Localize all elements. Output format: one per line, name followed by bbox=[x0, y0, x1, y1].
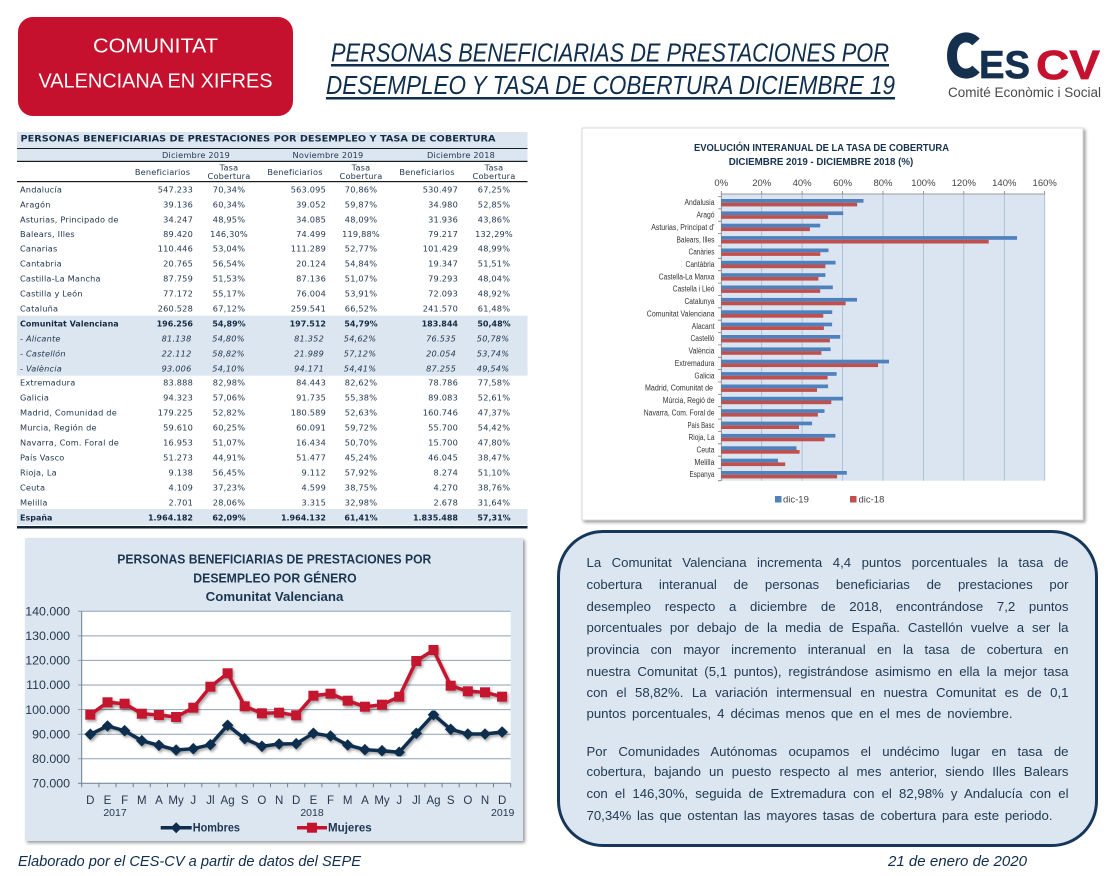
table rows: 47,37% bbox=[478, 408, 510, 418]
text panel: commentary: con el 146,30%, seguida de Extremadura con el 82,98% y Andalucía con el bbox=[586, 786, 1068, 801]
table rows: 2.701 bbox=[169, 498, 193, 508]
table rows: 20.124 bbox=[296, 259, 326, 269]
table rows: 28,06% bbox=[213, 498, 245, 508]
table rows: 179.225 bbox=[158, 408, 193, 418]
table rows: 54,80% bbox=[212, 334, 245, 344]
table header: Beneficiarios bbox=[399, 167, 455, 177]
table rows: 54,41% bbox=[344, 364, 376, 374]
table rows: 94.323 bbox=[163, 393, 193, 403]
table rows: 101.429 bbox=[423, 244, 458, 254]
panel: line chart by gender bbox=[25, 538, 523, 841]
table rows: 39.136 bbox=[163, 200, 193, 210]
table header: Beneficiarios bbox=[267, 167, 323, 177]
table rows: 62,09% bbox=[212, 514, 246, 523]
header badge: Comunitat Valenciana en xifres: COMUNITAT bbox=[93, 34, 218, 58]
table header bbox=[135, 150, 515, 181]
x axis month labels: M bbox=[137, 795, 147, 807]
bar chart category labels: Ceuta bbox=[696, 446, 715, 454]
table rows: 1.964.182 bbox=[148, 514, 193, 523]
table rows: Extremadura bbox=[20, 378, 75, 388]
table rows: 57,31% bbox=[477, 514, 511, 523]
table rows: 8.274 bbox=[434, 468, 458, 478]
table rows: 48,95% bbox=[213, 214, 245, 224]
table rows: 19.347 bbox=[428, 259, 458, 269]
bar chart category labels: Navarra, Com. Foral de bbox=[644, 408, 714, 417]
table rows: 51,51% bbox=[478, 259, 510, 269]
x axis percentages: 100% bbox=[911, 178, 936, 189]
y axis labels: 90.000 bbox=[32, 727, 70, 741]
table rows: 57,92% bbox=[345, 468, 377, 478]
table rows: 53,91% bbox=[345, 289, 377, 299]
bar chart category labels: Madrid, Comunitat de bbox=[645, 384, 713, 393]
table rows: 77.172 bbox=[163, 289, 193, 299]
table rows: 89.420 bbox=[163, 229, 193, 239]
table rows: 81.352 bbox=[294, 334, 324, 344]
table rows: Ceuta bbox=[20, 483, 45, 493]
x axis month labels: A bbox=[155, 795, 163, 807]
line chart title bbox=[117, 552, 431, 604]
bar chart category labels: Múrcia, Regió de bbox=[663, 396, 714, 405]
y axis labels: 120.000 bbox=[25, 654, 70, 668]
table rows: 4.599 bbox=[302, 483, 326, 493]
bar chart legend: dic-19 bbox=[783, 494, 809, 506]
table header: Cobertura bbox=[340, 171, 382, 181]
table rows: Comunitat Valenciana bbox=[20, 320, 119, 329]
x axis percentages: 80% bbox=[873, 178, 893, 189]
table rows bbox=[20, 185, 513, 523]
y axis labels: 70.000 bbox=[32, 776, 70, 790]
table rows: 55,17% bbox=[213, 289, 245, 299]
x axis month labels: J bbox=[396, 795, 402, 807]
table header: Diciembre 2018 bbox=[427, 150, 495, 160]
x axis month labels: N bbox=[481, 795, 489, 807]
table rows: 84.443 bbox=[296, 378, 326, 388]
y axis labels: 80.000 bbox=[32, 752, 70, 766]
table rows: 60,34% bbox=[213, 200, 245, 210]
line chart legend: Mujeres bbox=[328, 823, 372, 835]
table rows: 16.953 bbox=[163, 438, 193, 448]
table rows: 197.512 bbox=[290, 320, 326, 329]
table rows: 196.256 bbox=[157, 320, 193, 329]
x axis percentages: 60% bbox=[833, 178, 853, 189]
x axis percentages: 40% bbox=[793, 178, 812, 189]
table rows: 259.541 bbox=[291, 304, 326, 314]
table rows: 77,58% bbox=[478, 378, 510, 388]
table rows: 260.528 bbox=[158, 304, 193, 314]
table rows: 146,30% bbox=[210, 229, 248, 239]
bar chart category labels: Alacant bbox=[692, 322, 715, 331]
table rows: 530.497 bbox=[423, 185, 458, 195]
table rows: 44,91% bbox=[213, 453, 245, 463]
table rows: Melilla bbox=[20, 498, 48, 508]
x axis percentages: 120% bbox=[952, 178, 976, 189]
table rows: 76.535 bbox=[426, 334, 456, 344]
x axis month labels: O bbox=[257, 795, 266, 807]
x axis month labels: J bbox=[190, 795, 196, 807]
table rows: 59,87% bbox=[345, 200, 377, 210]
table rows: 37,23% bbox=[213, 483, 245, 493]
logo: CES-CV: Comité Econòmic i Social bbox=[948, 84, 1101, 100]
x axis percentages: 0% bbox=[714, 178, 729, 189]
table rows: 111.289 bbox=[291, 244, 326, 254]
table rows: 46.045 bbox=[428, 453, 458, 463]
year labels: 2017 bbox=[103, 807, 127, 819]
table rows: España bbox=[20, 514, 52, 523]
table rows: 53,04% bbox=[213, 244, 245, 254]
footer date: 21 de enero de 2020 bbox=[887, 854, 1027, 870]
bar chart category labels: Rioja, La bbox=[688, 433, 715, 442]
text panel: commentary: puntos porcentuales, 4 décimas menos que en el mes de noviembre. bbox=[586, 706, 1012, 721]
table rows: 51,07% bbox=[345, 274, 377, 284]
bar chart category labels: Catalunya bbox=[684, 297, 715, 306]
table rows: 54,89% bbox=[212, 320, 246, 329]
table rows: 38,47% bbox=[478, 453, 510, 463]
table header: Cobertura bbox=[473, 171, 515, 181]
footer source note: Elaborado por el CES-CV a partir de datos del SEPE bbox=[18, 854, 361, 870]
text panel: commentary: 70,34% las que ostentan las mayores tasas de cobertura para este periodo. bbox=[586, 808, 1052, 823]
logo: CES-CV bbox=[948, 37, 1101, 100]
bar chart category labels: Extremadura bbox=[675, 359, 715, 368]
series: Hombres bbox=[90, 715, 502, 752]
table rows: 48,92% bbox=[478, 289, 510, 299]
table rows: 54,62% bbox=[344, 334, 376, 344]
bar chart category labels: Castella i Lleó bbox=[673, 285, 715, 294]
x axis month labels: Ag bbox=[221, 795, 235, 807]
bar chart category labels: Melilla bbox=[694, 458, 715, 467]
table rows: 51.477 bbox=[296, 453, 326, 463]
table header: Beneficiarios bbox=[135, 167, 190, 177]
table rows: - Castellón bbox=[20, 349, 66, 359]
bar chart legend bbox=[775, 494, 884, 506]
table rows: 50,48% bbox=[477, 320, 511, 329]
table rows: 20.054 bbox=[426, 349, 456, 359]
table rows: 55.700 bbox=[428, 422, 458, 432]
table rows: 59.610 bbox=[163, 422, 193, 432]
table rows: 74.499 bbox=[296, 229, 326, 239]
text panel: commentary bbox=[557, 530, 1098, 847]
table rows: 132,29% bbox=[475, 229, 513, 239]
table rows: 54,10% bbox=[212, 364, 245, 374]
data table bbox=[17, 132, 528, 528]
table rows: 52,85% bbox=[478, 200, 510, 210]
main title: DESEMPLEO Y TASA DE COBERTURA DICIEMBRE 19 bbox=[326, 70, 895, 100]
table rows: 2.678 bbox=[434, 498, 458, 508]
bar chart category labels: Canàries bbox=[688, 248, 715, 257]
table rows: 160.746 bbox=[423, 408, 458, 418]
table rows: 45,24% bbox=[345, 453, 377, 463]
main title: PERSONAS BENEFICIARIAS DE PRESTACIONES POR bbox=[331, 38, 889, 68]
table rows: 20.765 bbox=[163, 259, 193, 269]
x axis month labels: My bbox=[374, 795, 390, 807]
table rows: 51,53% bbox=[213, 274, 245, 284]
table rows: 82,98% bbox=[213, 378, 245, 388]
header badge: Comunitat Valenciana en xifres: VALENCIANA EN XIFRES bbox=[38, 70, 272, 92]
x axis month labels: Jl bbox=[206, 795, 215, 807]
bar chart category labels: València bbox=[688, 347, 715, 356]
bar chart category labels: País Basc bbox=[688, 421, 715, 430]
table rows: 51,07% bbox=[213, 438, 245, 448]
table rows: 39.052 bbox=[296, 200, 326, 210]
table rows: 93.006 bbox=[162, 364, 192, 374]
year labels bbox=[103, 807, 515, 819]
table header: Noviembre 2019 bbox=[293, 150, 363, 160]
x axis month labels: S bbox=[447, 795, 455, 807]
table rows: 56,45% bbox=[213, 468, 245, 478]
header badge: Comunitat Valenciana en xifres bbox=[18, 17, 293, 116]
table rows: 54,79% bbox=[344, 320, 378, 329]
table rows: Cantabria bbox=[20, 259, 62, 269]
table rows: 57,12% bbox=[344, 349, 376, 359]
text panel: commentary: La Comunitat Valenciana incrementa 4,4 puntos porcentuales la tasa de bbox=[586, 555, 1068, 570]
bar chart category labels: Comunitat Valenciana bbox=[647, 310, 715, 318]
bar chart category labels: Andalusia bbox=[684, 198, 715, 207]
table rows: 110.446 bbox=[158, 244, 193, 254]
table rows: Navarra, Com. Foral de bbox=[20, 438, 119, 448]
line chart legend bbox=[161, 822, 372, 835]
logo: CES-CV: ES bbox=[979, 44, 1030, 87]
x axis month labels: M bbox=[343, 795, 352, 807]
table rows: 52,77% bbox=[345, 244, 377, 254]
line chart title: DESEMPLEO POR GÉNERO bbox=[193, 570, 357, 585]
table rows: Aragón bbox=[20, 200, 51, 210]
table rows: 78.786 bbox=[428, 378, 458, 388]
table rows: 70,86% bbox=[345, 185, 377, 195]
table rows: 87.136 bbox=[296, 274, 326, 284]
table rows: 55,38% bbox=[345, 393, 377, 403]
bar chart legend: dic-18 bbox=[858, 494, 884, 506]
table rows: 183.844 bbox=[422, 320, 458, 329]
table rows: 31,64% bbox=[478, 498, 510, 508]
table rows: Galicia bbox=[20, 393, 49, 403]
x axis month labels: D bbox=[86, 795, 94, 807]
table rows: 81.138 bbox=[162, 334, 192, 344]
x axis percentages: 20% bbox=[752, 178, 772, 189]
bars dic-18 bbox=[721, 203, 989, 478]
table rows: 43,86% bbox=[478, 214, 510, 224]
bar chart category labels: Castella-La Manxa bbox=[659, 272, 715, 281]
bar chart category labels: Castelló bbox=[690, 334, 715, 343]
bar chart title: DICIEMBRE 2019 - DICIEMBRE 2018 (%) bbox=[729, 156, 913, 168]
table rows: 34.085 bbox=[296, 214, 326, 224]
table rows: 48,99% bbox=[478, 244, 510, 254]
table rows: 89.083 bbox=[428, 393, 458, 403]
bar chart title bbox=[694, 141, 949, 168]
y axis labels bbox=[25, 604, 70, 790]
table header: Tasa bbox=[484, 162, 503, 172]
table rows: 51,10% bbox=[478, 468, 510, 478]
table rows: 60.091 bbox=[296, 422, 326, 432]
table rows: 22.112 bbox=[162, 349, 192, 359]
table rows: 119,88% bbox=[342, 229, 380, 239]
x axis month labels: Ag bbox=[426, 795, 441, 807]
text panel: commentary: cobertura interanual de personas beneficiarias de prestaciones por bbox=[586, 577, 1068, 592]
bar chart title: EVOLUCIÓN INTERANUAL DE LA TASA DE COBERTURA bbox=[694, 141, 949, 154]
bar chart category labels: Galicia bbox=[694, 371, 715, 380]
bar chart category labels: Aragó bbox=[696, 211, 715, 220]
table rows: - Alicante bbox=[20, 334, 61, 344]
x axis month labels: O bbox=[463, 795, 472, 807]
table rows: 59,72% bbox=[345, 422, 377, 432]
main title bbox=[326, 38, 895, 100]
table rows: Madrid, Comunidad de bbox=[20, 408, 117, 418]
table rows: 4.109 bbox=[169, 483, 193, 493]
x axis month labels: D bbox=[498, 795, 506, 807]
table rows: 91.735 bbox=[296, 393, 326, 403]
table rows: 1.964.132 bbox=[281, 514, 326, 523]
table rows: 50,78% bbox=[477, 334, 509, 344]
table rows: 79.293 bbox=[428, 274, 458, 284]
table rows: Castilla-La Mancha bbox=[20, 274, 101, 284]
table header: Diciembre 2019 bbox=[162, 150, 230, 160]
table rows: 9.138 bbox=[169, 468, 193, 478]
table rows: 66,52% bbox=[345, 304, 377, 314]
x axis percentages: 140% bbox=[992, 178, 1017, 189]
panel: bar chart of coverage rate bbox=[582, 128, 1083, 520]
table rows: 48,09% bbox=[345, 214, 377, 224]
text panel: commentary: desempleo respecto a diciembre de 2018, encontrándose 7,2 puntos bbox=[586, 599, 1068, 614]
table rows: Canarias bbox=[20, 244, 57, 254]
table rows: 9.112 bbox=[302, 468, 326, 478]
table rows: 51.273 bbox=[163, 453, 193, 463]
table rows: - València bbox=[20, 364, 62, 374]
y axis labels: 130.000 bbox=[25, 629, 70, 643]
bar chart category labels bbox=[644, 198, 715, 479]
table rows: Andalucía bbox=[20, 185, 62, 195]
x axis month labels: N bbox=[275, 795, 283, 807]
table rows: 180.589 bbox=[291, 408, 326, 418]
table rows: 547.233 bbox=[158, 185, 193, 195]
bar chart category labels: Espanya bbox=[690, 470, 715, 479]
table rows: 57,06% bbox=[213, 393, 245, 403]
line chart legend: Hombres bbox=[193, 823, 240, 835]
x axis percentages: 160% bbox=[1033, 178, 1057, 189]
table rows: 4.270 bbox=[434, 483, 458, 493]
table rows: 52,61% bbox=[478, 393, 510, 403]
text panel: commentary: porcentuales por debajo de la media de España. Castellón vuelve a ser la bbox=[586, 620, 1068, 635]
table rows: 53,74% bbox=[477, 349, 509, 359]
table rows: 32,98% bbox=[345, 498, 377, 508]
x axis month labels: S bbox=[241, 795, 249, 807]
x axis month labels: My bbox=[168, 795, 184, 807]
table rows: Balears, Illes bbox=[20, 229, 75, 239]
table rows: 87.255 bbox=[426, 364, 456, 374]
table rows: 82,62% bbox=[345, 378, 377, 388]
x axis percentages bbox=[714, 178, 1057, 189]
x axis month labels: A bbox=[361, 795, 369, 807]
table rows: 31.936 bbox=[428, 214, 458, 224]
series: Mujeres bbox=[90, 650, 502, 717]
bar chart category labels: Asturias, Principat d' bbox=[651, 223, 715, 232]
text panel: commentary: cobertura, bajando un puesto respecto al mes anterior, siendo Illes Balears bbox=[586, 764, 1068, 779]
table rows: 56,54% bbox=[213, 259, 245, 269]
text panel: commentary: nuestra Comunitat (5,1 puntos), registrándose asimismo en ella la mejor tasa bbox=[586, 664, 1068, 679]
table rows: 49,54% bbox=[477, 364, 509, 374]
table rows: 83.888 bbox=[163, 378, 193, 388]
table rows: 60,25% bbox=[213, 422, 245, 432]
bars dic-19 bbox=[721, 199, 1017, 475]
table rows: 21.989 bbox=[294, 349, 324, 359]
year labels: 2018 bbox=[300, 807, 324, 819]
line chart title: PERSONAS BENEFICIARIAS DE PRESTACIONES POR bbox=[117, 552, 431, 566]
table rows: 15.700 bbox=[428, 438, 458, 448]
x axis month labels: F bbox=[327, 795, 334, 807]
table rows: 67,25% bbox=[478, 185, 510, 195]
x axis month labels: F bbox=[121, 795, 128, 807]
logo: CES-CV: CV bbox=[1036, 42, 1101, 88]
table rows: 61,48% bbox=[478, 304, 510, 314]
table rows: 79.217 bbox=[428, 229, 458, 239]
table rows: 3.315 bbox=[302, 498, 326, 508]
table rows: 67,12% bbox=[213, 304, 245, 314]
table rows: 34.247 bbox=[163, 214, 193, 224]
table rows: 87.759 bbox=[163, 274, 193, 284]
x axis month labels: Jl bbox=[412, 795, 420, 807]
table rows: Rioja, La bbox=[20, 468, 57, 478]
text panel: commentary: Por Comunidades Autónomas ocupamos el undécimo lugar en tasa de bbox=[586, 744, 1068, 759]
line chart title: Comunitat Valenciana bbox=[206, 590, 344, 604]
table rows: 47,80% bbox=[478, 438, 510, 448]
table rows: Asturias, Principado de bbox=[20, 214, 119, 224]
x axis month labels bbox=[86, 795, 506, 807]
x axis month labels: E bbox=[310, 795, 318, 807]
table rows: 241.570 bbox=[423, 304, 458, 314]
table rows: País Vasco bbox=[20, 453, 64, 463]
table rows: 48,04% bbox=[478, 274, 510, 284]
table title: PERSONAS BENEFICIARIAS DE PRESTACIONES POR DESEMPLEO Y TASA DE COBERTURA bbox=[20, 134, 496, 144]
year labels: 2019 bbox=[491, 807, 515, 819]
bar chart category labels: Balears, Illes bbox=[676, 235, 715, 244]
table header: Tasa bbox=[219, 162, 238, 172]
table rows: 54,42% bbox=[478, 422, 510, 432]
table rows: 52,82% bbox=[213, 408, 245, 418]
table rows: 54,84% bbox=[345, 259, 377, 269]
table rows: 38,76% bbox=[478, 483, 510, 493]
table rows: 58,82% bbox=[212, 349, 245, 359]
y axis labels: 110.000 bbox=[26, 678, 70, 692]
table rows: 50,70% bbox=[345, 438, 377, 448]
table rows: 34.980 bbox=[428, 200, 458, 210]
table rows: 52,63% bbox=[345, 408, 377, 418]
table rows: 70,34% bbox=[213, 185, 245, 195]
table rows: 1.835.488 bbox=[413, 514, 458, 523]
table header: Tasa bbox=[351, 162, 370, 172]
table header: Cobertura bbox=[208, 171, 250, 181]
x axis month labels: E bbox=[104, 795, 112, 807]
table rows: Cataluña bbox=[20, 304, 58, 314]
table rows: 16.434 bbox=[296, 438, 326, 448]
table rows: 72.093 bbox=[428, 289, 458, 299]
y axis labels: 140.000 bbox=[25, 604, 70, 618]
table rows: 94.171 bbox=[294, 364, 324, 374]
table rows: 563.095 bbox=[291, 185, 326, 195]
x axis month labels: D bbox=[292, 795, 300, 807]
y axis labels: 100.000 bbox=[25, 703, 70, 717]
table rows: Castilla y León bbox=[20, 289, 83, 299]
bar chart category labels: Cantàbria bbox=[686, 260, 715, 269]
text panel: commentary: provincia con mayor incremento interanual en la tasa de cobertura en bbox=[586, 642, 1068, 657]
table rows: Murcia, Región de bbox=[20, 422, 97, 432]
table rows: 76.004 bbox=[296, 289, 326, 299]
text panel: commentary: con el 58,82%. La variación intermensual en nuestra Comunitat es de 0,1 bbox=[586, 685, 1068, 700]
table rows: 38,75% bbox=[345, 483, 377, 493]
table rows: 61,41% bbox=[344, 514, 378, 523]
